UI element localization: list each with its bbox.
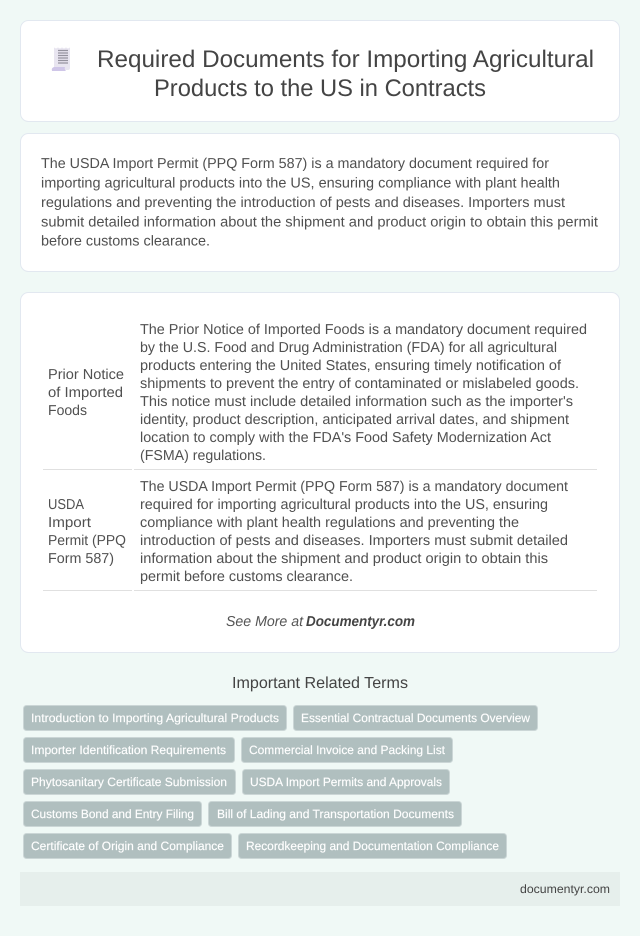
tag (238, 834, 506, 858)
related terms tags (24, 706, 538, 858)
tag (24, 770, 236, 794)
see more link: See More at (226, 614, 304, 630)
row: prior notice (48, 322, 587, 464)
row label: prior notice (48, 367, 124, 419)
tag: Phytosanitary Certificate Submission (31, 775, 227, 789)
tag (24, 706, 286, 730)
row description: prior notice: This notice must include detailed information such as the importer's (140, 394, 573, 410)
tag: Recordkeeping and Documentation Compliance (246, 839, 499, 853)
see more link (226, 614, 415, 630)
footer: documentyr.com (520, 882, 610, 896)
row label: prior notice: of Imported (48, 385, 123, 401)
tag: Customs Bond and Entry Filing (31, 807, 194, 821)
row label: prior notice: Prior Notice (48, 367, 124, 383)
row description: prior notice (140, 322, 587, 464)
tag (242, 770, 450, 794)
row description: usda import permit: introduction of pests and diseases. Importers must submit detailed (140, 533, 568, 549)
row description: usda import permit: required for importing agricultural products into the US, ensuring (140, 497, 548, 513)
tag: USDA Import Permits and Approvals (250, 775, 442, 789)
heading: related terms: Important Related Terms (232, 675, 408, 692)
row description: usda import permit: compliance with plant health regulations and preventing the (140, 515, 519, 531)
row description: usda import permit: permit before customs clearance. (140, 569, 353, 585)
panel: summary paragraph: The USDA Import Permit (PPQ Form 587) is a mandatory document required for (41, 156, 549, 172)
panel: summary paragraph: importing agricultural products into the US, ensuring compliance with plant health (41, 175, 560, 191)
row description: prior notice: The Prior Notice of Imported Foods is a mandatory document required (140, 322, 587, 338)
tag (24, 738, 234, 762)
panel: documents table (20, 292, 620, 652)
tag (242, 738, 452, 762)
row label: usda import permit: Import (48, 515, 91, 531)
row description: prior notice: products entering the United States, ensuring timely notification of (140, 358, 562, 374)
row label: prior notice: Foods (48, 403, 87, 419)
tag: Bill of Lading and Transportation Documents (217, 807, 454, 821)
title (97, 46, 594, 102)
footer (20, 872, 620, 906)
icon: document (52, 48, 70, 71)
panel: summary paragraph: before customs clearance. (41, 234, 210, 250)
row description: prior notice: by the U.S. Food and Drug Administration (FDA) for all agricultural (140, 340, 557, 356)
see more link: Documentyr.com (306, 614, 415, 630)
row description: usda import permit (140, 479, 568, 585)
row description: prior notice: shipments to prevent the entry of contaminated or mislabeled goods. (140, 376, 579, 392)
tag: Commercial Invoice and Packing List (249, 743, 446, 757)
panel: header (20, 20, 620, 122)
title: Products to the US in Contracts (154, 75, 486, 102)
tag: Certificate of Origin and Compliance (31, 839, 224, 853)
title: Required Documents for Importing Agricultural (97, 46, 594, 73)
row label: usda import permit: Form 587) (48, 551, 114, 567)
row description: prior notice: location to comply with the FDA's Food Safety Modernization Act (140, 430, 551, 446)
tag (208, 802, 462, 826)
tag: Importer Identification Requirements (31, 743, 226, 757)
panel: summary paragraph: submit detailed information about the shipment and product origin to obtain this permit (41, 214, 598, 230)
row label: usda import permit: USDA (48, 497, 84, 513)
row: usda import permit (48, 479, 568, 585)
row description: usda import permit: information about the shipment and product origin to obtain this (140, 551, 548, 567)
row label: usda import permit (48, 497, 126, 567)
panel: summary paragraph: regulations and preventing the introduction of pests and diseases. Importers must (41, 195, 565, 211)
row description: prior notice: identity, product description, anticipated arrival dates, and shipment (140, 412, 569, 428)
tag (294, 706, 538, 730)
tag (24, 834, 232, 858)
row description: prior notice: (FSMA) regulations. (140, 448, 266, 464)
panel: summary paragraph (20, 134, 620, 272)
row label: usda import permit: Permit (PPQ (48, 533, 126, 549)
tag (24, 802, 202, 826)
row description: usda import permit: The USDA Import Permit (PPQ Form 587) is a mandatory document (140, 479, 568, 495)
tag: Essential Contractual Documents Overview (301, 711, 530, 725)
tag: Introduction to Importing Agricultural Products (31, 711, 279, 725)
